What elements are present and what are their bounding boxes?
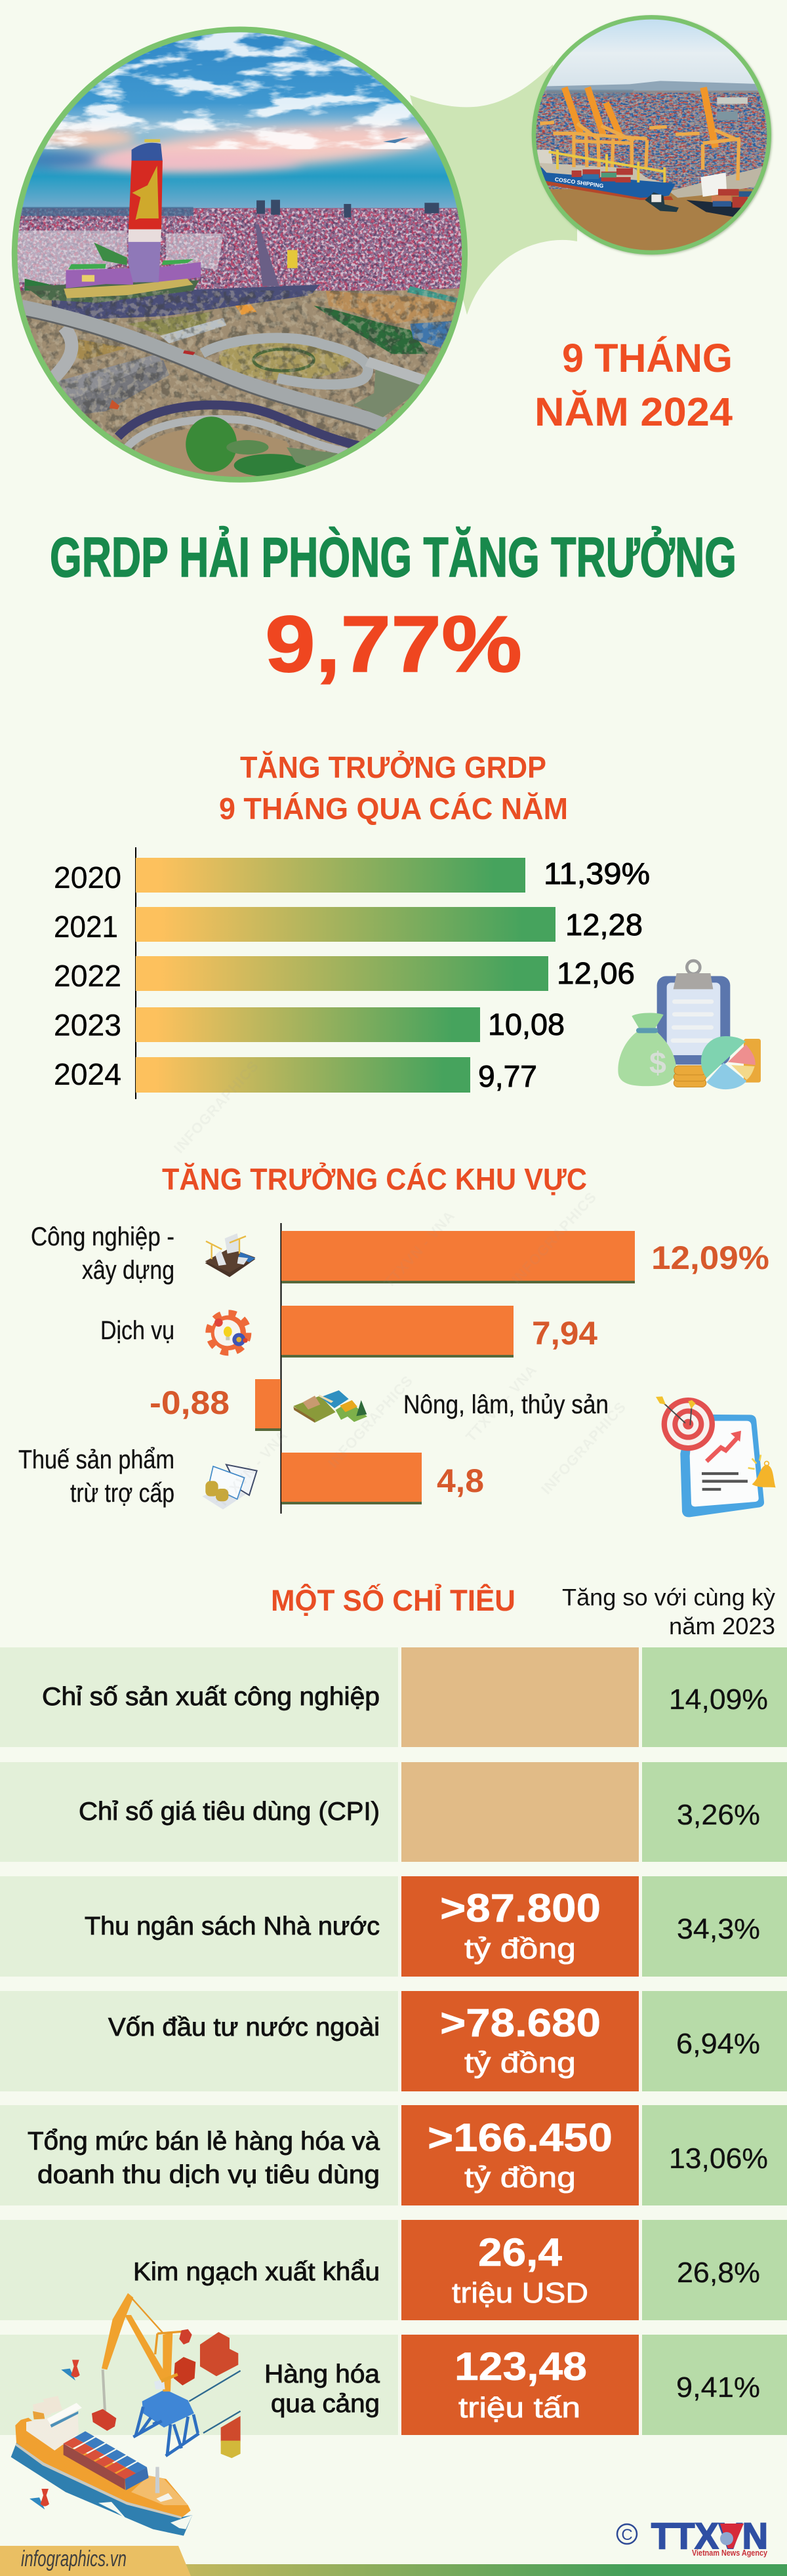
row: industrial production index: 14,09% [669, 1683, 768, 1716]
row: industrial production index [0, 1647, 787, 1747]
row: cargo through ports [0, 2335, 787, 2435]
row: cargo through ports: triệu tấn [458, 2392, 580, 2424]
icon: service gear [209, 1313, 249, 1353]
row: exports: Kim ngạch xuất khẩu [133, 2258, 380, 2286]
bar 2022: 2022 [54, 959, 121, 993]
bar 2020 [54, 856, 650, 895]
row: foreign investment: >78.680 [440, 2001, 601, 2045]
bar 2021 [54, 907, 643, 944]
table: indicators [0, 1647, 787, 2435]
bar 2023 [54, 1007, 565, 1042]
heading: GRDP growth by year: TĂNG TRƯỞNG GRDP [240, 750, 546, 784]
bar 2022: 12,06 [557, 956, 635, 990]
row: cargo through ports: Hàng hóa [264, 2360, 380, 2388]
icon: clipboard, money bag and pie chart: $ [649, 1046, 666, 1080]
photo: container port [531, 14, 774, 257]
watermark: TTXVN - VNA [213, 1427, 291, 1510]
bar: industry and construction [31, 1222, 769, 1285]
rails [189, 2371, 241, 2433]
bar: agriculture: -0,88 [150, 1384, 230, 1421]
watermark: INFOGRAPHICS [508, 1188, 600, 1287]
buoys [30, 2369, 75, 2510]
bar: industry and construction: Công nghiệp - [31, 1222, 174, 1251]
row: state budget revenue: tỷ đồng [464, 1933, 576, 1965]
row: retail sales: Tổng mức bán lẻ hàng hóa và [28, 2127, 380, 2156]
bar 2024 [54, 1057, 537, 1093]
row: retail sales [0, 2105, 787, 2205]
stacked containers [200, 2332, 238, 2376]
row: cargo through ports: 9,41% [676, 2371, 760, 2404]
bar 2020: 2020 [54, 860, 121, 895]
watermark: INFOGRAPHICS [325, 1372, 416, 1471]
row: CPI: 3,26% [677, 1799, 760, 1831]
row: foreign investment [0, 1991, 787, 2091]
row: retail sales: >166.450 [428, 2116, 613, 2160]
row: foreign investment: tỷ đồng [464, 2047, 576, 2079]
footer strip [0, 2564, 787, 2576]
row: CPI: Chỉ số giá tiêu dùng (CPI) [79, 1798, 380, 1826]
bar 2023: 10,08 [488, 1007, 565, 1041]
heading: GRDP growth by year: 9 THÁNG QUA CÁC NĂM [219, 792, 568, 826]
bar 2021: 12,28 [565, 908, 643, 942]
bar 2022 [54, 956, 635, 993]
bar: agriculture [150, 1379, 609, 1431]
watermark: INFOGRAPHICS [538, 1398, 630, 1497]
footer tab: source [0, 2546, 191, 2576]
icon: construction [205, 1234, 255, 1277]
heading: period [535, 336, 733, 434]
row: retail sales: doanh thu dịch vụ tiêu dùng [37, 2161, 380, 2189]
row: exports: triệu USD [452, 2277, 588, 2309]
row: exports: 26,8% [677, 2257, 760, 2289]
photo: Hai Phong city and interchange [7, 26, 479, 492]
heading: growth by sector: TĂNG TRƯỞNG CÁC KHU VỰC [162, 1162, 587, 1196]
row: cargo through ports: qua cảng [271, 2390, 380, 2418]
bar chart: GRDP growth 2020-2024 [54, 847, 650, 1099]
row: retail sales: 13,06% [669, 2143, 768, 2175]
bar: product tax: Thuế sản phẩm [18, 1445, 174, 1474]
ship [11, 2396, 192, 2536]
bar 2023: 2023 [54, 1008, 121, 1042]
row: state budget revenue: >87.800 [440, 1886, 601, 1930]
row: retail sales: tỷ đồng [464, 2162, 576, 2194]
row: foreign investment: 6,94% [676, 2028, 760, 2060]
icon: clipboard, money bag and pie chart [618, 961, 761, 1089]
watermark [171, 1057, 630, 1510]
bar: services: 7,94 [532, 1315, 597, 1352]
heading: period: 9 THÁNG [562, 336, 733, 380]
column note: năm 2023 [669, 1613, 775, 1640]
copyright mark: C [621, 2526, 633, 2544]
column note: Tăng so với cùng kỳ [562, 1584, 775, 1611]
row: state budget revenue [0, 1876, 787, 1977]
logo: TTXVN: Vietnam News Agency [692, 2548, 768, 2558]
icon: tax documents and coins [202, 1464, 257, 1510]
crane [92, 2293, 199, 2456]
watermark: TTXVN - VNA [462, 1361, 540, 1445]
heading: period: NĂM 2024 [535, 390, 733, 434]
bar: industry and construction: 12,09% [651, 1239, 769, 1276]
icon: farm and forest [293, 1390, 367, 1422]
headline number: 9,77% [265, 599, 522, 689]
row: CPI [0, 1762, 787, 1862]
heading: GRDP growth by year [219, 750, 568, 826]
bar 2024: 2024 [54, 1057, 121, 1091]
row: state budget revenue: Thu ngân sách Nhà nước [85, 1912, 380, 1941]
row: exports: 26,4 [478, 2230, 563, 2274]
icon: target and report with bell [656, 1396, 776, 1517]
photo: container port: COSCO SHIPPING [554, 176, 604, 189]
copyright mark [617, 2524, 637, 2544]
heading: selected indicators: MỘT SỐ CHỈ TIÊU [271, 1584, 515, 1617]
row: foreign investment: Vốn đầu tư nước ngoài [108, 2013, 380, 2042]
bar: services [100, 1306, 597, 1358]
connector between the two photos [410, 64, 577, 315]
bar: product tax: trừ trợ cấp [70, 1479, 174, 1508]
logo: TTXVN: TTXVN [651, 2515, 768, 2556]
footer tab: source: infographics.vn [21, 2546, 127, 2571]
bar: industry and construction: xây dựng [82, 1256, 174, 1285]
watermark: TTXVN - VNA [380, 1207, 458, 1291]
row: state budget revenue: 34,3% [677, 1913, 760, 1945]
bar: services: Dịch vụ [100, 1316, 174, 1345]
row: industrial production index: Chỉ số sản xuất công nghiệp [42, 1683, 380, 1711]
row: cargo through ports: 123,48 [454, 2345, 587, 2388]
bar 2024: 9,77 [478, 1059, 537, 1093]
watermark: INFOGRAPHICS [171, 1057, 262, 1156]
bar: product tax: 4,8 [437, 1462, 484, 1499]
illustration: container ship and port crane [11, 2293, 241, 2536]
bar: agriculture: Nông, lâm, thủy sản [403, 1390, 609, 1419]
bar chart: growth by sector [18, 1222, 769, 1514]
bar: product tax [18, 1445, 484, 1508]
row: exports [0, 2220, 787, 2320]
bar 2021: 2021 [54, 910, 118, 944]
column note [562, 1584, 775, 1640]
bar 2020: 11,39% [544, 856, 650, 891]
